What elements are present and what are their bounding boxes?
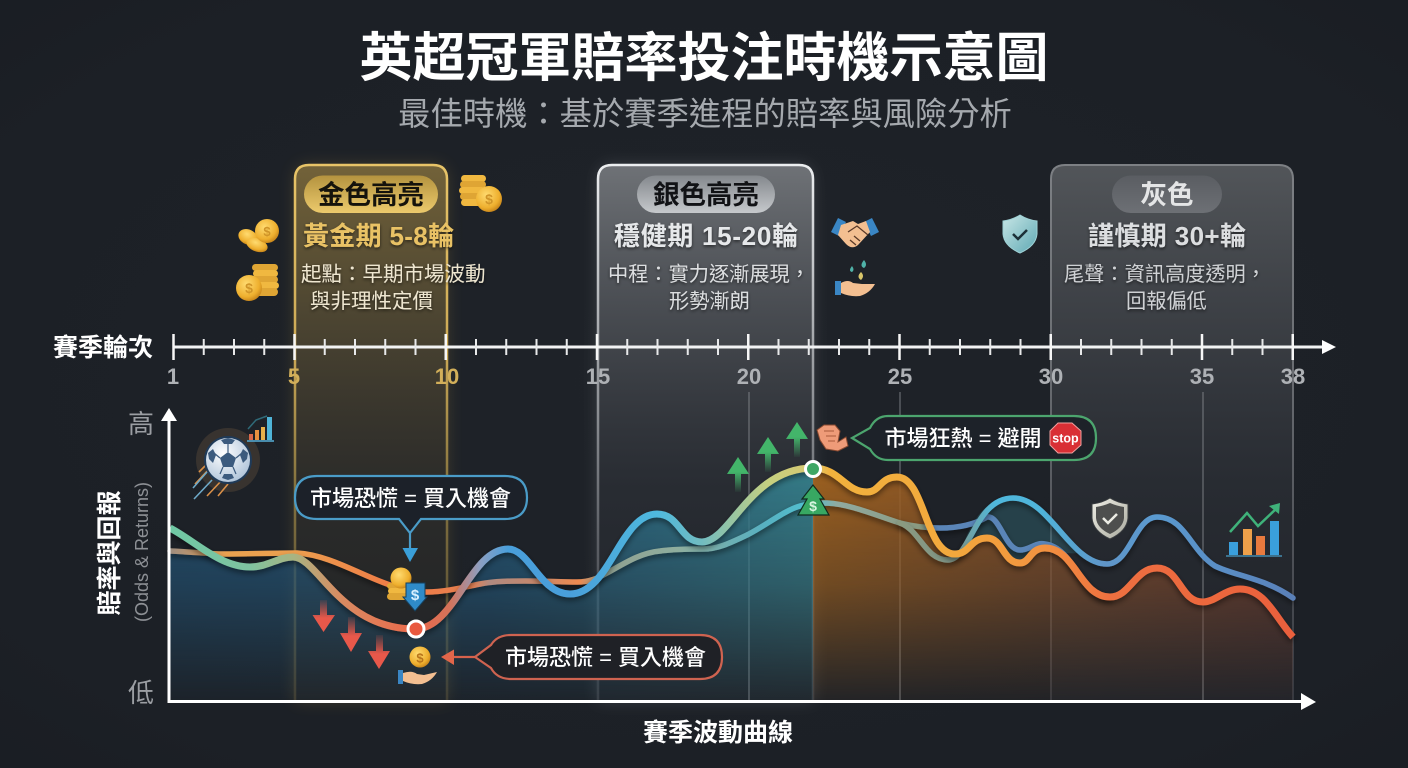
- icon: coin stack lower left: $: [245, 280, 253, 296]
- icon: coin stack lower left: [236, 264, 279, 301]
- silver description: 中程：實力逐漸展現，: [608, 263, 810, 286]
- round axis numbers: 15: [586, 364, 610, 389]
- icon: teal shield: [1003, 215, 1037, 253]
- gold band labels: [301, 176, 486, 313]
- icon: coins with blue down shield: [387, 568, 427, 611]
- icon: green up arrow with dollar: [798, 485, 829, 515]
- teal area between curves: [962, 498, 1080, 563]
- icon: grey shield: [1092, 498, 1128, 539]
- icon: coin over hand: [398, 646, 437, 684]
- callout: market mania: [852, 416, 1096, 460]
- icon: coin pile upper left: $: [263, 224, 271, 239]
- gold description: 與非理性定價: [310, 290, 433, 313]
- grey pill: [1112, 176, 1222, 213]
- chart: seasonal odds curves: [170, 468, 1293, 701]
- icon: small bar chart: [247, 416, 274, 441]
- y axis high label: 高: [128, 409, 154, 439]
- panel: grey period band: [1051, 165, 1293, 701]
- x axis title: 賽季波動曲線: [643, 718, 793, 747]
- title: 英超冠軍賠率投注時機示意圖: [360, 29, 1048, 88]
- orange area fill: [813, 468, 1293, 701]
- silver band labels: [608, 176, 810, 313]
- round axis numbers: 38: [1281, 364, 1305, 389]
- icon: coin over hand: $: [416, 650, 424, 666]
- gold pill: [304, 176, 438, 213]
- y axis english subtitle: (Odds & Returns): [132, 482, 152, 622]
- round axis numbers: [167, 364, 1305, 389]
- round axis numbers: 5: [288, 364, 300, 389]
- silver pill: 銀色高亮: [653, 180, 759, 210]
- line: primary curve: [170, 468, 1293, 637]
- callout: market panic lower: [441, 635, 722, 679]
- y axis low label: 低: [128, 678, 154, 708]
- marker: panic low point: [408, 621, 424, 637]
- callout: market panic upper: [295, 476, 527, 562]
- grey heading: 謹慎期 30+輪: [1088, 221, 1246, 251]
- gold pill: 金色高亮: [318, 180, 424, 210]
- round axis: [53, 333, 1336, 389]
- icon: fist: [817, 425, 848, 451]
- icon: soccer ball: [193, 428, 260, 499]
- icon: hand with drops: [835, 260, 875, 296]
- callout: market panic upper: 市場恐慌 = 買入機會: [310, 486, 511, 511]
- icon: coins with blue down shield: $: [411, 587, 420, 604]
- gold description: 起點：早期市場波動: [301, 263, 486, 286]
- icon: coin stack upper right: [459, 175, 502, 212]
- icon: green up arrow with dollar: $: [809, 498, 817, 514]
- callout: market panic lower: 市場恐慌 = 買入機會: [505, 645, 706, 670]
- chart axes: [161, 408, 1316, 710]
- grey pill: 灰色: [1140, 180, 1194, 210]
- gold heading: 黃金期 5-8輪: [303, 221, 454, 251]
- blue area fill: [170, 468, 813, 701]
- grey description: 回報偏低: [1126, 290, 1207, 313]
- round axis line and ticks: [173, 334, 1336, 360]
- grey description: 尾聲：資訊高度透明，: [1064, 263, 1266, 286]
- round axis numbers: 30: [1039, 364, 1063, 389]
- round axis numbers: 20: [737, 364, 761, 389]
- green up arrows: [727, 422, 808, 492]
- panel: silver period band: [598, 165, 813, 701]
- round axis numbers: 25: [888, 364, 912, 389]
- round axis numbers: 1: [167, 364, 179, 389]
- icon: stop sign: stop: [1052, 432, 1079, 446]
- panel: gold period band: [295, 165, 447, 701]
- callout: market mania: 市場狂熱 = 避開: [884, 426, 1042, 451]
- grey band labels: [1064, 176, 1266, 313]
- silver pill: [637, 176, 775, 213]
- y axis title: 賠率與回報: [96, 490, 124, 616]
- round axis numbers: 10: [435, 364, 459, 389]
- icon: rising bar chart: [1226, 503, 1282, 556]
- icon: coin pile upper left: [236, 219, 279, 255]
- line: secondary curve: [170, 503, 1110, 597]
- icon: handshake: [831, 218, 879, 247]
- subtitle: 最佳時機：基於賽季進程的賠率與風險分析: [398, 96, 1012, 132]
- icon: stop sign: [1050, 423, 1081, 453]
- silver heading: 穩健期 15-20輪: [614, 221, 798, 251]
- round axis numbers: 35: [1190, 364, 1214, 389]
- marker: mania peak: [806, 462, 820, 476]
- red down arrows: [312, 600, 390, 669]
- icon: coin stack upper right: $: [485, 191, 493, 207]
- round axis title: 賽季輪次: [53, 333, 153, 362]
- silver description: 形勢漸朗: [669, 290, 750, 313]
- line: tertiary curve: [900, 498, 1293, 598]
